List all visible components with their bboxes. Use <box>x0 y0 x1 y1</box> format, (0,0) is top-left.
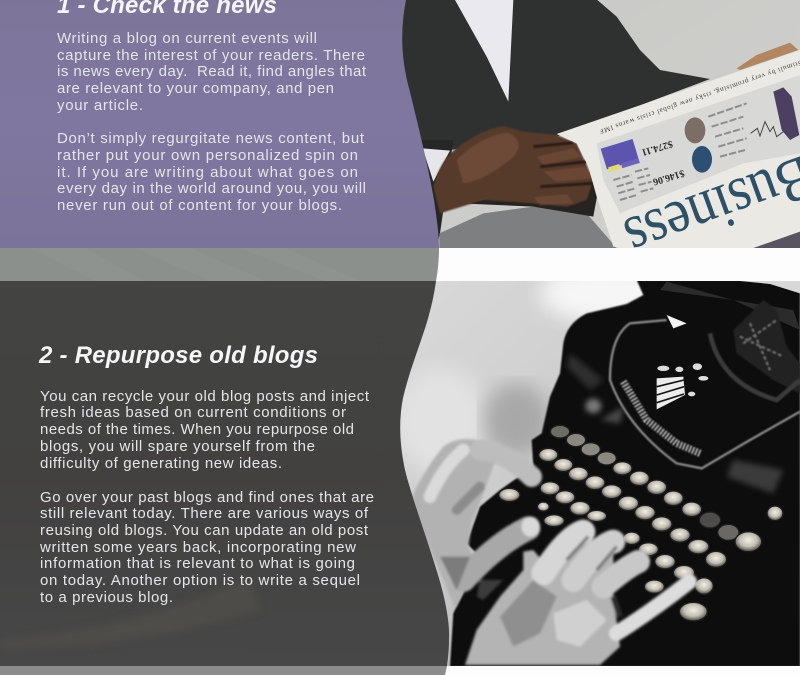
infographic: price numbers: $274.11 <box>640 138 674 158</box>
paragraph: go over past blogs <box>39 489 374 606</box>
shirt cuff <box>423 148 450 182</box>
paragraph: go over past blogs: Go over your past blogs and find ones that are <box>40 489 374 506</box>
left hand <box>412 439 689 665</box>
paragraph: go over past blogs: written some years back, incorporating new <box>39 539 356 556</box>
paragraph: go over past blogs: reusing old blogs. You can update an old post <box>40 522 369 539</box>
paragraph: recycle old posts: needs of the times. When you repurpose old <box>40 421 354 438</box>
paragraph: go over past blogs: information that is relevant to what is going <box>40 555 355 572</box>
infographic: purple octagon <box>773 87 799 140</box>
paragraph: writing a blog: capture the interest of your readers. There <box>57 47 365 64</box>
paragraph: writing a blog <box>57 30 367 114</box>
keys <box>499 425 783 621</box>
paragraph: writing a blog: Writing a blog on current events will <box>57 30 317 47</box>
photo: man reading business newspaper <box>402 0 800 248</box>
dark jacket <box>400 0 710 150</box>
infographic: line chart <box>751 122 783 137</box>
white shirt <box>455 0 513 102</box>
newspaper headline text lines: Stimuli by very promising, risky new global crisis warns IMF <box>598 58 800 135</box>
paragraph: don't regurgitate: it. If you are writing about what goes on <box>57 164 358 181</box>
paragraph: don't regurgitate <box>57 130 366 214</box>
newspaper page <box>557 50 800 248</box>
section 2 text <box>38 342 374 606</box>
paragraph: go over past blogs: on today. Another option is to write a sequel <box>40 572 360 589</box>
grey backdrop <box>400 280 800 667</box>
panel: grey strip between sections <box>0 248 439 281</box>
infographic: price numbers <box>642 140 684 186</box>
panel: bottom strip <box>0 666 447 675</box>
paragraph: don't regurgitate: every day in the world around you, you will <box>57 180 366 197</box>
hand on the newspaper <box>433 126 593 213</box>
heading: 2 - Repurpose old blogs: 2 - Repurpose old blogs <box>38 342 318 369</box>
infographic: small print columns <box>613 103 747 200</box>
paragraph: don't regurgitate: never run out of content for your blogs. <box>57 197 342 214</box>
paper bail at the top <box>740 280 800 293</box>
paragraph: writing a blog: is news every day. Read it, find angles that <box>57 63 367 80</box>
typewriter basket frame <box>610 320 800 468</box>
fingers of right hand <box>737 43 798 70</box>
paragraph: go over past blogs: to a previous blog. <box>40 589 173 606</box>
infographic: blue badge <box>692 146 712 173</box>
newspaper grey body column <box>597 75 800 213</box>
panel: section 1 purple <box>0 0 439 248</box>
infographic: purple box <box>601 139 640 173</box>
body sheen <box>567 353 783 493</box>
mechanism on the right <box>710 300 800 400</box>
paragraph: writing a blog: are relevant to your company, and pen <box>57 80 334 97</box>
paragraph: recycle old posts <box>40 388 370 472</box>
reflections <box>657 315 708 396</box>
paragraph: don't regurgitate: Don’t simply regurgitate news content, but <box>57 130 365 147</box>
purple strip at bottom corner of newspaper <box>753 232 800 248</box>
paragraph: recycle old posts: blogs, you will spare yourself from the <box>40 438 315 455</box>
wall behind the reader <box>400 0 800 248</box>
white reflection stack <box>657 377 685 409</box>
paragraph: go over past blogs: still relevant today. There are various ways of <box>40 505 369 522</box>
infographic: brown badge <box>685 117 705 143</box>
type bars <box>623 382 700 453</box>
dark shadow under the hand <box>439 180 600 217</box>
paragraph: recycle old posts: difficulty of generating new ideas. <box>40 455 282 472</box>
carriage shine <box>660 282 800 330</box>
section 1 text <box>57 0 367 214</box>
trousers <box>439 207 617 248</box>
paragraph: recycle old posts: fresh ideas based on current conditions or <box>40 404 346 421</box>
right hand <box>465 533 620 665</box>
jacket lower section <box>422 140 453 240</box>
photo: hands on a vintage typewriter <box>393 263 800 667</box>
panel: section 2 dark <box>0 281 449 666</box>
typewriter body <box>450 280 800 667</box>
paragraph: writing a blog: your article. <box>57 97 143 114</box>
paragraph: recycle old posts: You can recycle your old blog posts and inject <box>40 388 370 405</box>
infographic: price numbers: $146.06 <box>651 167 686 187</box>
paragraph: don't regurgitate: rather put your own personalized spin on <box>57 147 358 164</box>
